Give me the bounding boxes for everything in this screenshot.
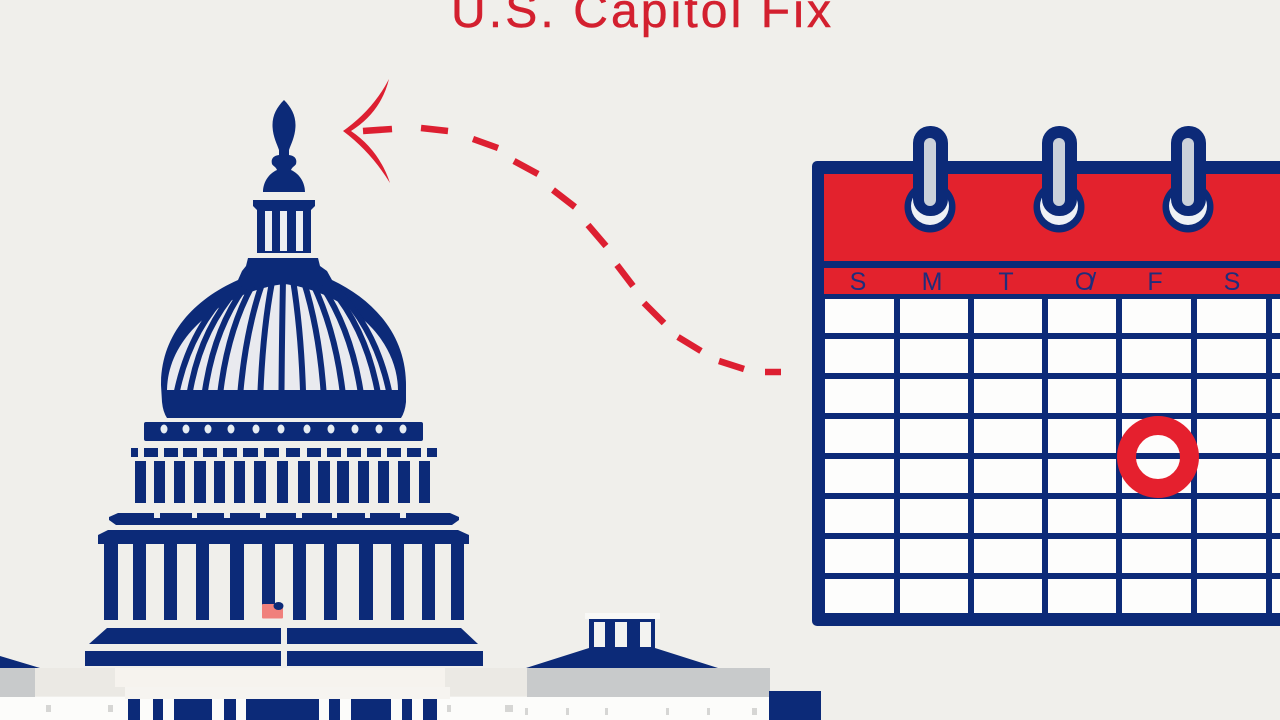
calendar frame <box>812 161 1280 626</box>
arrow: dashed curve from calendar to Capitol <box>343 79 781 372</box>
weekday letters: S <box>1224 268 1240 296</box>
lantern <box>253 200 315 253</box>
lower colonnade <box>98 530 469 620</box>
frieze blocks <box>131 448 437 457</box>
lower building wings and base <box>0 656 821 720</box>
balcony <box>109 513 459 525</box>
weekday letters: S <box>850 268 866 296</box>
weekday letters: T <box>998 268 1014 296</box>
arrowhead <box>343 79 390 183</box>
binder ring 3 <box>1162 126 1214 232</box>
upper colonnade <box>135 461 430 503</box>
dotted ring band <box>144 422 423 441</box>
dashed path <box>363 128 781 372</box>
date grid <box>825 294 1280 614</box>
weekday letters: O/ <box>1075 268 1096 296</box>
finial statue <box>263 100 305 192</box>
calendar <box>812 126 1280 626</box>
right wing cupola <box>526 613 718 668</box>
weekday strip <box>824 268 1280 294</box>
weekday letters: F <box>1147 268 1163 296</box>
small flag <box>262 602 284 618</box>
binder ring 1 <box>904 126 956 232</box>
weekday letters <box>850 268 1240 296</box>
red circled date <box>1126 426 1190 488</box>
red header <box>824 174 1280 261</box>
illustration: U.S. Capitol building <box>0 100 821 720</box>
weekday letters: M <box>922 268 942 296</box>
binder ring 2 <box>1034 126 1084 232</box>
ribbed dome <box>161 258 406 418</box>
portico steps <box>85 628 483 666</box>
